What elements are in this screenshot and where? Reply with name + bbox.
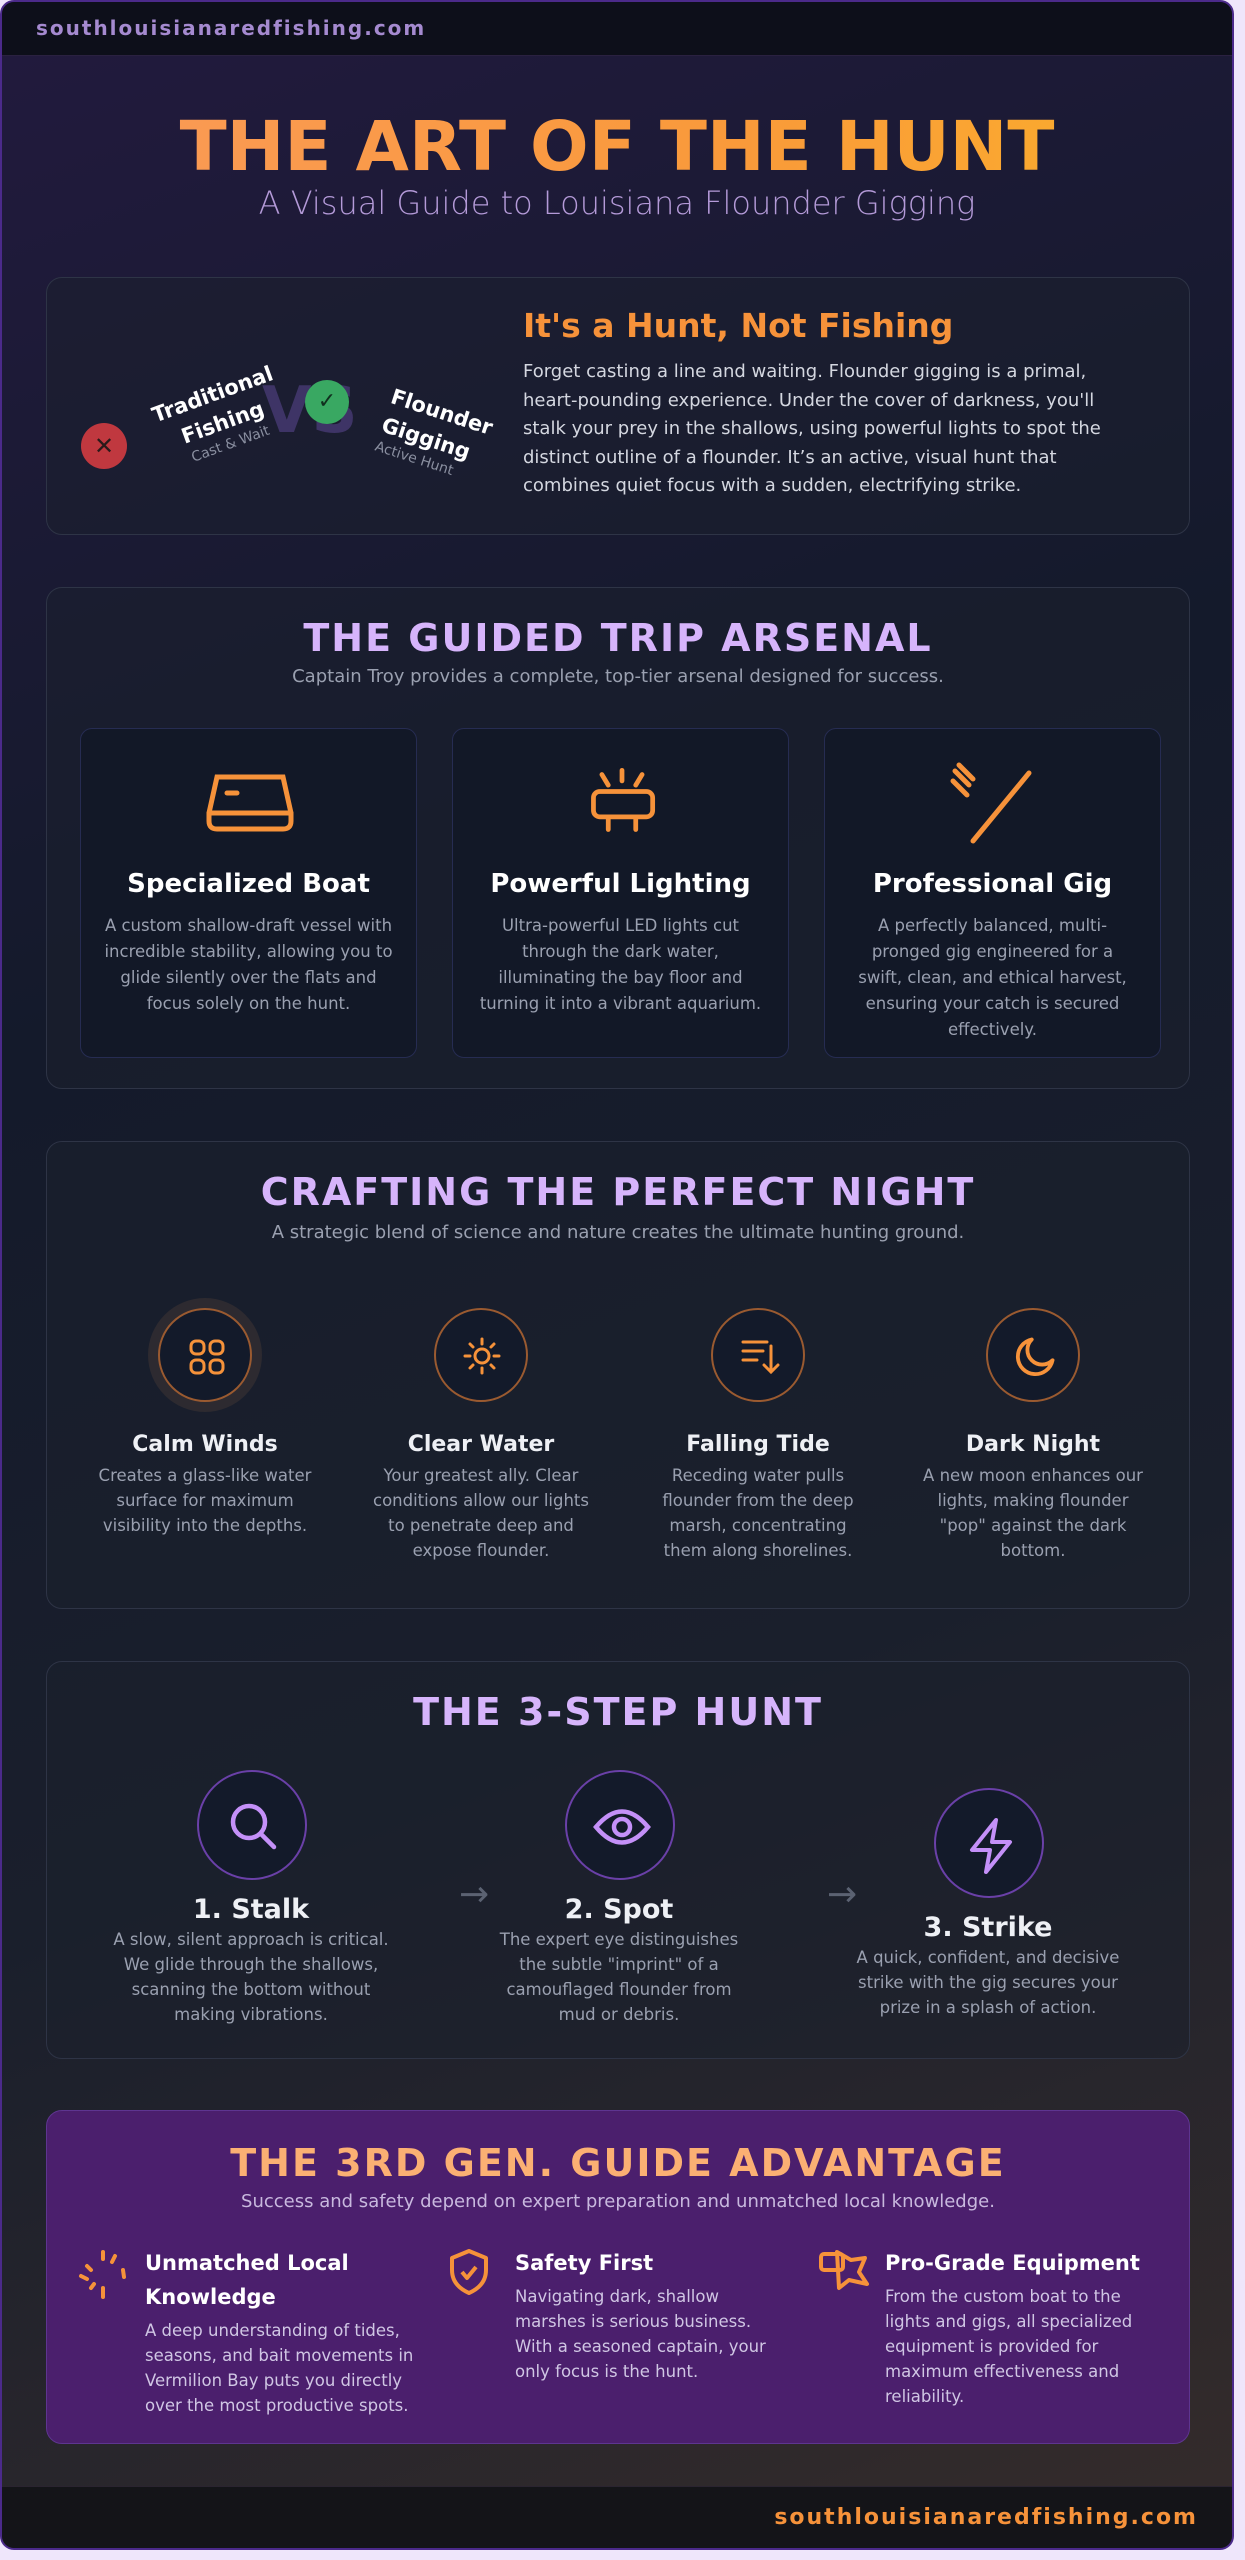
- step: strike: [856, 1788, 1119, 2017]
- icon: light: [591, 768, 656, 832]
- subheading: Success and safety depend on expert preparation and unmatched local knowledge.: [241, 2191, 995, 2212]
- step: strike: 3. Strike: [924, 1912, 1052, 1943]
- card: boat: Specialized Boat: [127, 869, 370, 899]
- condition: falling tide: [662, 1308, 854, 1560]
- subtitle: A Visual Guide to Louisiana Flounder Gigging: [259, 184, 975, 222]
- icon: vs comparison: Cast & Wait: [189, 423, 272, 466]
- step: stalk: A slow, silent approach is critical. We glide through the shallows, scanning the bottom without making vibrations.: [113, 1930, 389, 2024]
- arrow 2: →: [827, 1874, 857, 1915]
- title: THE ART OF THE HUNT: [180, 107, 1054, 187]
- icon: vs comparison: ✕: [94, 432, 114, 460]
- header bar: [2, 2, 1232, 56]
- heading: it's a hunt: It's a Hunt, Not Fishing: [523, 306, 953, 345]
- icon: vs comparison: ✓: [318, 389, 336, 414]
- advantage: equipment: From the custom boat to the lights and gigs, all specialized equipment is provided for maximum effectiveness and reliability.: [885, 2287, 1132, 2406]
- condition: clear water: [373, 1308, 589, 1560]
- advantage: safety: Navigating dark, shallow marshes is serious business. With a seasoned captain, your only focus is the hunt.: [515, 2287, 766, 2381]
- subheading: Captain Troy provides a complete, top-tier arsenal designed for success.: [292, 666, 944, 687]
- heading: THE 3-STEP HUNT: [413, 1690, 823, 1734]
- card: gig: [824, 728, 1161, 1058]
- title: [2, 102, 1232, 192]
- card: lighting: Powerful Lighting: [490, 869, 751, 899]
- condition: clear water: Clear Water: [408, 1432, 554, 1457]
- card: lighting: [452, 728, 789, 1058]
- card: boat: [80, 728, 417, 1058]
- condition: dark night: [923, 1308, 1143, 1560]
- icon: boat: [206, 774, 294, 832]
- panel: guide advantage: [46, 2110, 1190, 2444]
- advantage: local knowledge: A deep understanding of tides, seasons, and bait movements in Vermilion Bay puts you directly over the most productive spots.: [145, 2321, 413, 2415]
- panel: perfect night: [46, 1141, 1190, 1609]
- body text: Forget casting a line and waiting. Flounder gigging is a primal, heart-pounding experience. Under the cover of darkness, you'll stalk your prey in the shallows, using powerful lights to spot the distinct outline of a flounder. It’s an active, visual hunt that combines quiet focus with a sudden, electrifying strike.: [523, 361, 1101, 496]
- condition: dark night: Dark Night: [966, 1432, 1100, 1457]
- heading: THE 3RD GEN. GUIDE ADVANTAGE: [230, 2141, 1006, 2185]
- icon: vs comparison: Traditional: [149, 361, 276, 427]
- step: spot: 2. Spot: [565, 1894, 673, 1925]
- advantage: safety: Safety First: [515, 2251, 653, 2275]
- icon: vs comparison: Fishing: [178, 397, 267, 449]
- condition: calm winds: [99, 1298, 312, 1535]
- advantage: safety: [450, 2249, 766, 2381]
- card: gig: A perfectly balanced, multi-pronged gig engineered for a swift, clean, and ethical harvest, ensuring your catch is secured effectively.: [858, 916, 1127, 1039]
- header url: southlouisianaredfishing.com: [36, 16, 426, 40]
- footer url: southlouisianaredfishing.com: [774, 2505, 1198, 2530]
- condition: dark night: A new moon enhances our lights, making flounder "pop" against the dark bottom.: [923, 1466, 1143, 1560]
- advantage: local knowledge: Unmatched Local Knowledge: [145, 2251, 349, 2309]
- arrow 1: →: [459, 1874, 489, 1915]
- step: stalk: 1. Stalk: [193, 1894, 309, 1925]
- icon: gig: [950, 762, 1032, 844]
- icon: vs comparison: Active Hunt: [373, 439, 455, 479]
- icon: vs comparison: [81, 361, 496, 479]
- icon: vs comparison: Gigging: [379, 413, 473, 464]
- card: boat: A custom shallow-draft vessel with incredible stability, allowing you to glide silently over the flats and focus solely on the hunt.: [104, 916, 393, 1013]
- condition: falling tide: Falling Tide: [686, 1432, 830, 1457]
- icon: vs comparison: Flounder: [388, 384, 496, 440]
- panel: arsenal: [46, 587, 1190, 1089]
- step: spot: [500, 1770, 738, 2024]
- card: lighting: Ultra-powerful LED lights cut through the dark water, illuminating the bay floor and turning it into a vibrant aquarium.: [480, 916, 761, 1013]
- advantage: local knowledge: [78, 2250, 413, 2415]
- step: strike: A quick, confident, and decisive strike with the gig secures your prize in a splash of action.: [857, 1948, 1119, 2017]
- heading: CRAFTING THE PERFECT NIGHT: [261, 1170, 975, 1214]
- panel: 3-step hunt: [46, 1661, 1190, 2059]
- footer bar: [2, 2486, 1232, 2552]
- condition: calm winds: Creates a glass-like water surface for maximum visibility into the depths.: [99, 1466, 311, 1535]
- condition: clear water: Your greatest ally. Clear conditions allow our lights to penetrate deep and expose flounder.: [373, 1466, 589, 1560]
- advantage: equipment: Pro-Grade Equipment: [885, 2251, 1140, 2275]
- condition: falling tide: Receding water pulls flounder from the deep marsh, concentrating them along shorelines.: [662, 1466, 854, 1560]
- panel: hunt not fishing: [46, 277, 1190, 535]
- condition: calm winds: Calm Winds: [132, 1432, 278, 1457]
- icon: vs comparison: VS: [262, 374, 358, 448]
- advantage: equipment: [819, 2250, 1140, 2406]
- card: gig: Professional Gig: [873, 869, 1112, 899]
- heading: THE GUIDED TRIP ARSENAL: [303, 616, 933, 660]
- step: spot: The expert eye distinguishes the subtle "imprint" of a camouflaged flounder from mud or debris.: [500, 1930, 738, 2024]
- step: stalk: [113, 1770, 389, 2024]
- subheading: A strategic blend of science and nature creates the ultimate hunting ground.: [272, 1222, 964, 1243]
